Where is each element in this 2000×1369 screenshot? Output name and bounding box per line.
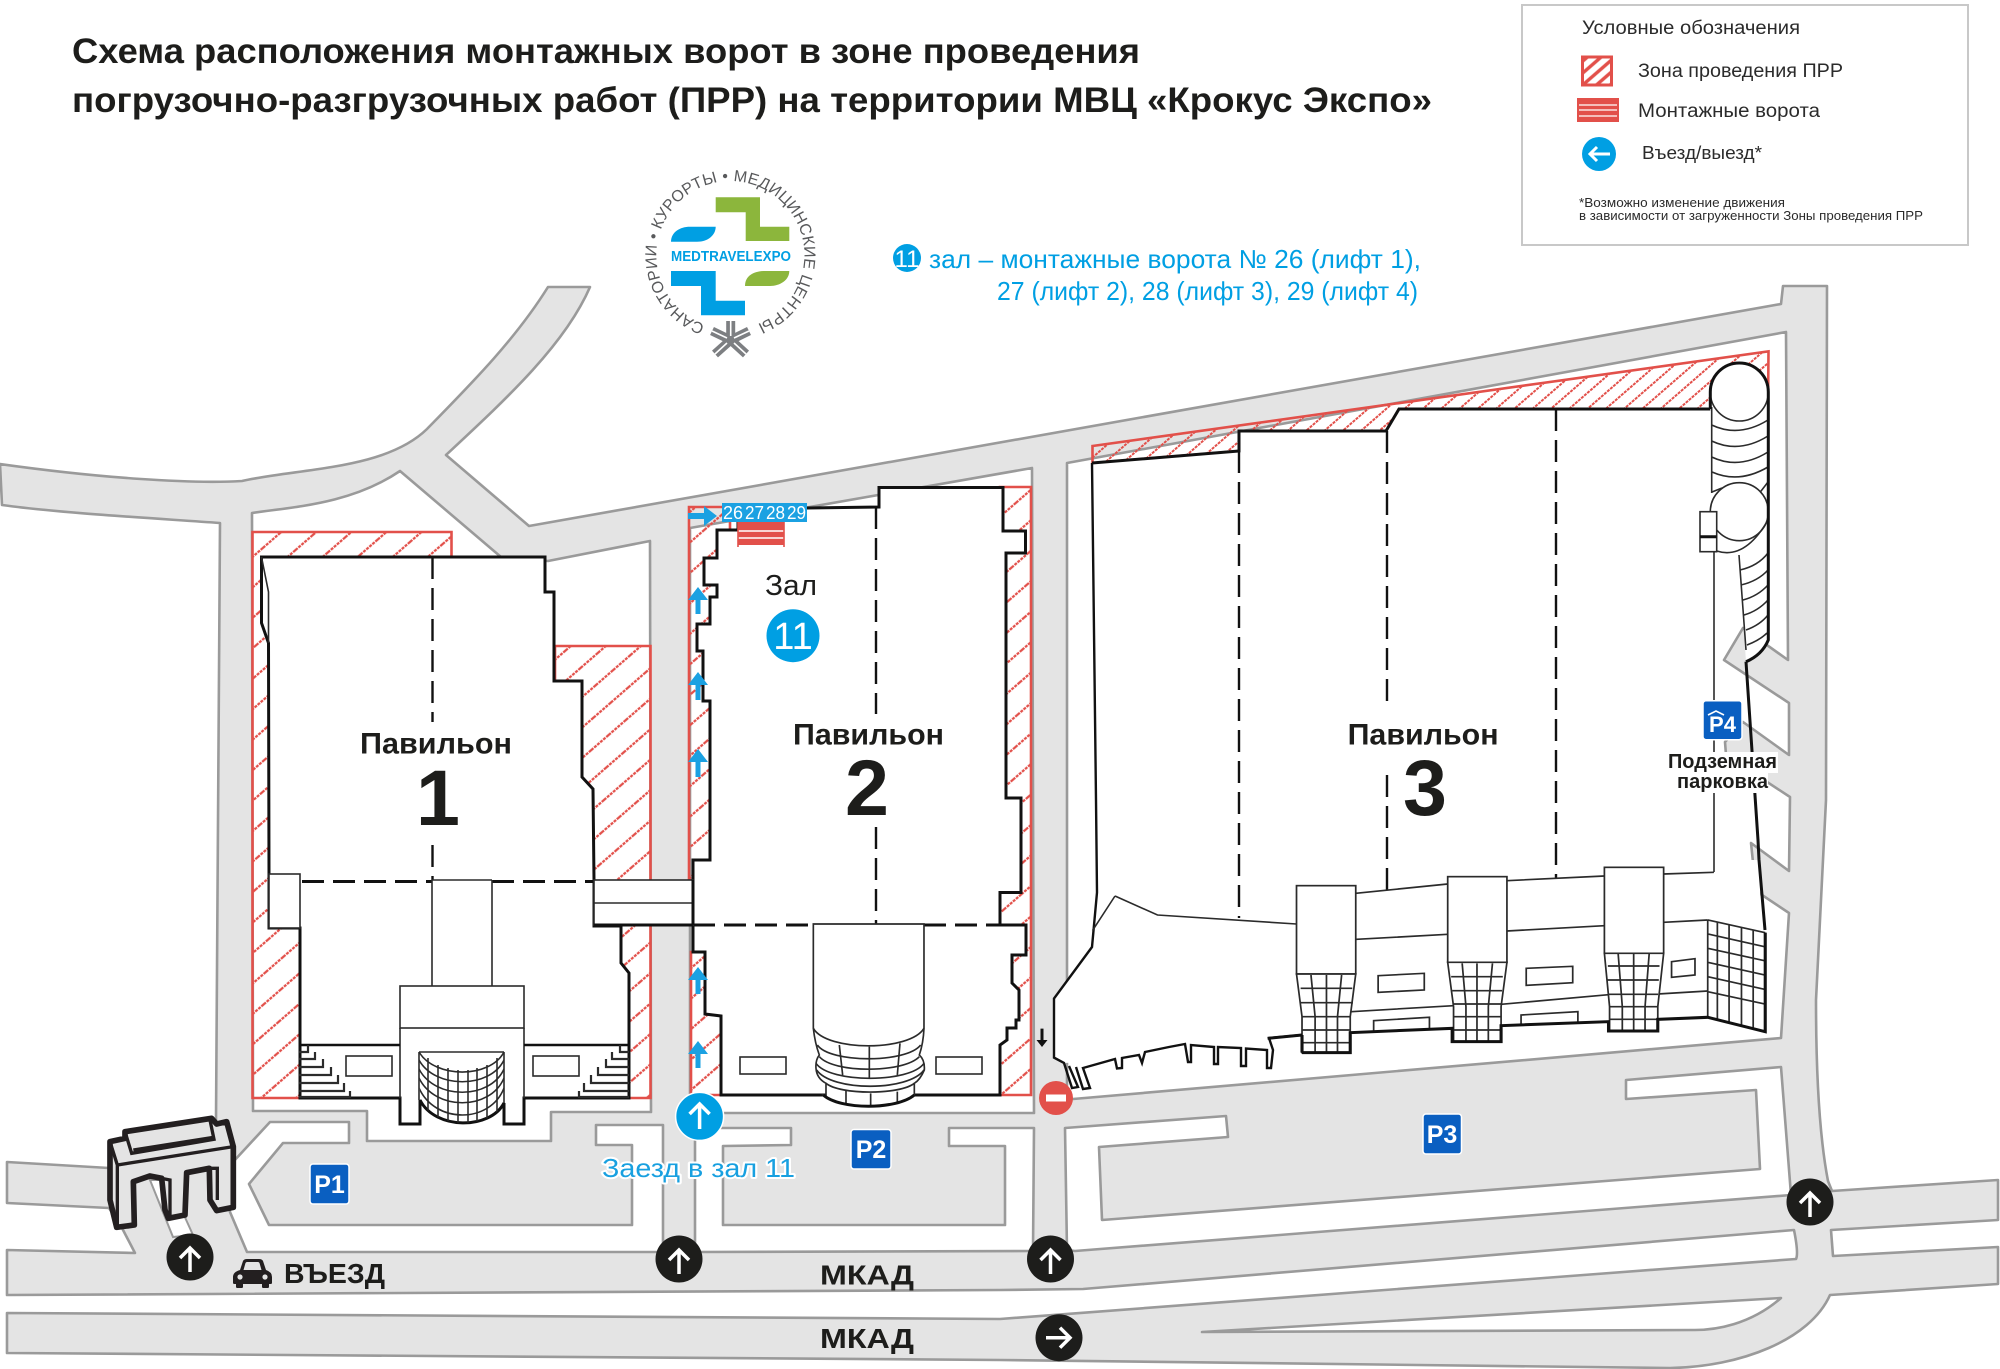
zone: pavilion 1 east hatch: [555, 646, 650, 1098]
hall 11 gates note: 27 (лифт 2), 28 (лифт 3), 29 (лифт 4): [997, 276, 1418, 306]
zone: pavilion 1 west and north hatch: [252, 532, 452, 1098]
legend panel: *Возможно изменение движения: [1579, 196, 1785, 210]
parking sign P4: P4: [1709, 712, 1737, 737]
parking sign P1: P1: [314, 1171, 345, 1199]
legend: hatch swatch: [1582, 57, 1612, 85]
black arrow marker 3: [1027, 1236, 1074, 1282]
pavilion 1 label: Павильон: [360, 728, 512, 761]
gate numbers 26-29: 27: [745, 502, 764, 523]
title: погрузочно-разгрузочных работ (ПРР) на территории МВЦ «Крокус Экспо»: [72, 81, 1432, 120]
pavilion 1 building: [262, 557, 629, 1130]
hall 11 gates note: зал – монтажные ворота № 26 (лифт 1),: [929, 244, 1421, 274]
gate: main entrance: [110, 1118, 233, 1227]
pavilion 3 label: [1348, 718, 1499, 832]
hall 11 badge: [766, 609, 820, 662]
legend panel: [1522, 5, 1968, 245]
pavilion 3 building: [1054, 409, 1765, 1089]
legend panel: Въезд/выезд*: [1642, 143, 1762, 163]
pavilion 2 label: [793, 719, 944, 832]
underground parking label: Подземная: [1668, 751, 1777, 773]
entry to hall 11 marker: [676, 1092, 724, 1140]
black arrow marker 4: [1786, 1178, 1834, 1226]
black arrow marker 2: [656, 1236, 702, 1282]
logo: Medtravelexpo: САНАТОРИИ • КУРОРТЫ • МЕДИЦИНСКИЕ ЦЕНТРЫ: [645, 170, 816, 334]
zone: pavilion 2 west hatch: [689, 507, 730, 1095]
gate doors marker: [738, 520, 784, 547]
MKAD label lower: МКАД: [820, 1323, 914, 1354]
corridor between pavilions: [594, 880, 693, 925]
hall label: Зал: [765, 570, 817, 602]
pavilion 1 label: [360, 728, 512, 842]
legend: gate swatch: [1577, 98, 1619, 122]
legend panel: Условные обозначения: [1582, 18, 1800, 39]
pavilion 3 label: 3: [1403, 743, 1447, 832]
pavilion 2 label: Павильон: [793, 719, 944, 752]
parking sign P2: [851, 1130, 891, 1169]
legend: entry icon: [1582, 137, 1616, 171]
pavilion 2 label: 2: [845, 743, 889, 832]
legend panel: Зона проведения ПРР: [1638, 61, 1843, 82]
pavilion 1 label: 1: [416, 753, 460, 842]
pavilion 3 label: Павильон: [1348, 718, 1499, 751]
parking sign P3: P3: [1427, 1121, 1457, 1149]
legend panel: в зависимости от загруженности Зоны проведения ПРР: [1579, 209, 1923, 223]
zone: pavilion 3 north hatch: [1092, 351, 1768, 463]
arrows: blue up arrows along pavilion 2: [688, 587, 708, 1068]
road strip under gate: [150, 1180, 193, 1237]
arrow: right entry arrow: [688, 506, 717, 526]
underground parking label: парковка: [1677, 771, 1769, 793]
gate numbers 26-29: [722, 502, 807, 523]
hall 11 gates note: 11: [895, 246, 919, 273]
underground parking label: [1668, 751, 1778, 793]
hall 11 badge: 11: [773, 616, 813, 658]
road network: [0, 286, 1998, 1368]
title: [72, 32, 1432, 120]
icon: car: [233, 1259, 272, 1288]
black arrow marker right: [1036, 1314, 1082, 1361]
entry label: ВЪЕЗД: [284, 1258, 385, 1289]
logo: Medtravelexpo: MEDTRAVELEXPO: [671, 249, 791, 265]
no entry sign: [1039, 1081, 1073, 1115]
gate numbers 26-29: 26: [723, 502, 743, 523]
parking sign P1: [310, 1164, 349, 1204]
pavilion 2 building: [693, 488, 1026, 1107]
black arrow marker 1: [166, 1234, 214, 1280]
zone: pavilion 2 east hatch: [1000, 487, 1031, 1095]
hall 11 gates note: [893, 244, 1421, 306]
legend panel: Монтажные ворота: [1638, 101, 1820, 122]
entry to hall 11 label: Заезд в зал 11: [602, 1153, 795, 1183]
gate numbers 26-29: 28: [766, 502, 785, 523]
ramp of pavilion 3: [1700, 363, 1768, 662]
MKAD label upper: МКАД: [820, 1259, 914, 1290]
parking sign P3: [1423, 1114, 1462, 1154]
parking sign P4: [1703, 701, 1742, 740]
title: Схема расположения монтажных ворот в зоне проведения: [72, 32, 1140, 71]
small down arrow: [1036, 1029, 1048, 1047]
parking sign P2: P2: [856, 1136, 886, 1164]
gate numbers 26-29: 29: [787, 502, 806, 523]
